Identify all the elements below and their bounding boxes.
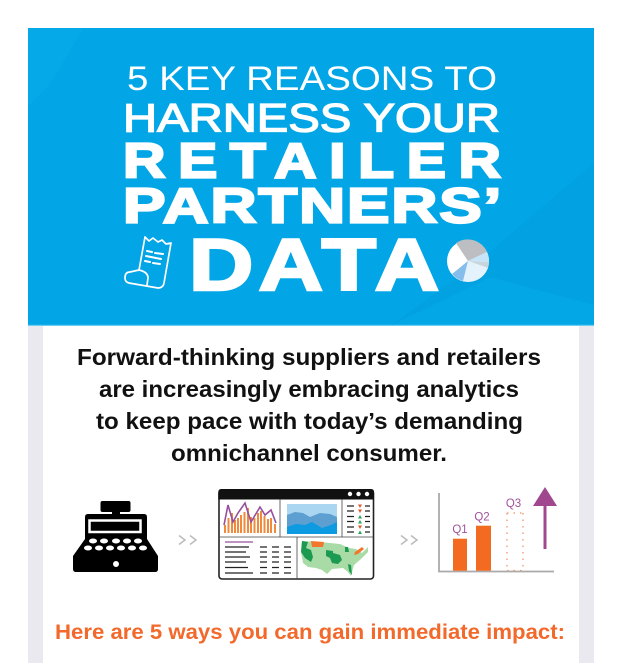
title: PARTNERS’ <box>123 179 501 234</box>
intro text: omnichannel consumer. <box>171 440 447 466</box>
title <box>123 60 501 306</box>
intro text: Forward-thinking suppliers and retailers <box>77 344 541 370</box>
quarterly bar chart: Q1 <box>452 524 468 536</box>
quarterly bar chart <box>439 487 557 572</box>
side rails <box>28 326 594 663</box>
callout: five ways heading: Here are 5 ways you can gain immediate impact: <box>55 621 565 644</box>
intro text: are increasingly embracing analytics <box>99 376 519 402</box>
title: HARNESS YOUR <box>123 96 500 140</box>
title: 5 KEY REASONS TO <box>127 60 497 98</box>
quarterly bar chart: Q2 <box>474 512 490 524</box>
arrow: chevrons 1 <box>179 536 196 544</box>
dashboard: bar and line chart <box>224 503 276 533</box>
intro text: to keep pace with today’s demanding <box>96 408 523 434</box>
dashboard: indicator list <box>347 504 370 534</box>
title: RETAILER <box>123 134 501 188</box>
arrow: chevrons 2 <box>401 536 417 544</box>
quarterly bar chart: Q3 <box>506 498 521 510</box>
header banner <box>28 28 594 326</box>
icon: receipt <box>125 237 171 288</box>
arrow: growth <box>533 487 557 549</box>
icon: pie chart <box>447 239 489 282</box>
dashboard: area chart <box>287 504 337 534</box>
dashboard: data table <box>225 542 291 573</box>
dashboard illustration <box>218 489 374 579</box>
intro text <box>77 344 541 466</box>
title: DATA <box>189 225 439 306</box>
dashboard: US map <box>301 541 368 576</box>
icon: cash register <box>73 501 158 572</box>
